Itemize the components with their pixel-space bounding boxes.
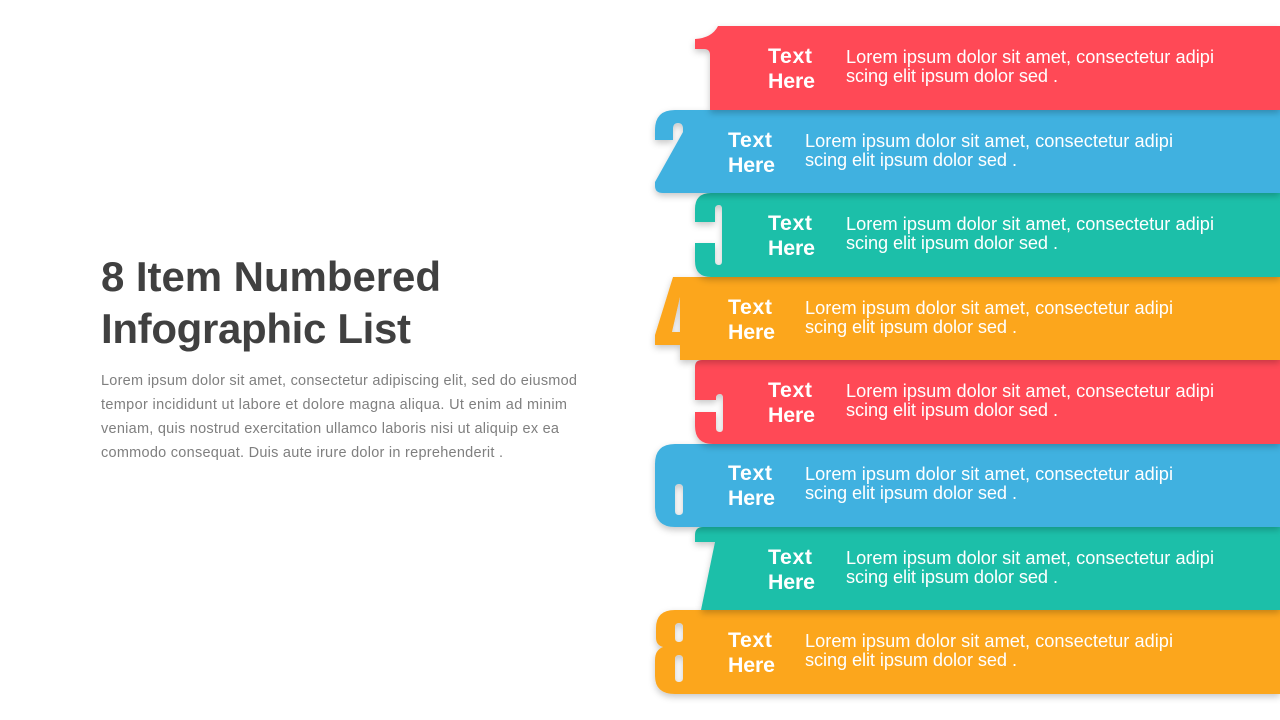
- item 4 heading: Text: [728, 295, 772, 319]
- item 6 heading: Here: [728, 486, 775, 510]
- item 7 heading: [768, 545, 815, 594]
- item 3 description: scing elit ipsum dolor sed .: [846, 233, 1058, 253]
- shape: blue banner with number 6: [655, 444, 1280, 527]
- item 5 description: [846, 381, 1214, 420]
- item 5 description: scing elit ipsum dolor sed .: [846, 400, 1058, 420]
- body text: Lorem ipsum dolor sit amet, consectetur adipiscing elit, sed do eiusmod: [101, 373, 577, 389]
- shape: red banner with number 5: [695, 360, 1280, 444]
- item 6 description: Lorem ipsum dolor sit amet, consectetur adipi: [805, 464, 1173, 484]
- item 1 heading: [768, 44, 815, 93]
- body text: [101, 373, 577, 461]
- panel: item 7: [695, 527, 1280, 610]
- item 3 heading: Text: [768, 211, 812, 235]
- item 3 description: [846, 214, 1214, 253]
- panel: item 5: [695, 360, 1280, 444]
- item 4 heading: Here: [728, 320, 775, 344]
- item 7 description: scing elit ipsum dolor sed .: [846, 567, 1058, 587]
- shape: teal banner with number 7: [695, 527, 1280, 610]
- item 1 description: Lorem ipsum dolor sit amet, consectetur adipi: [846, 47, 1214, 67]
- title: [101, 253, 441, 352]
- body text: commodo consequat. Duis aute irure dolor in reprehenderit .: [101, 445, 503, 461]
- item 4 description: Lorem ipsum dolor sit amet, consectetur adipi: [805, 298, 1173, 318]
- item 8 description: Lorem ipsum dolor sit amet, consectetur adipi: [805, 631, 1173, 651]
- item 2 description: scing elit ipsum dolor sed .: [805, 150, 1017, 170]
- item 3 heading: Here: [768, 236, 815, 260]
- item 8 description: scing elit ipsum dolor sed .: [805, 650, 1017, 670]
- shape: orange banner with number 4: [655, 277, 1280, 360]
- item 7 description: [846, 548, 1214, 587]
- item 8 heading: Text: [728, 628, 772, 652]
- item 6 description: [805, 464, 1173, 503]
- title: Infographic List: [101, 305, 411, 352]
- item 4 description: [805, 298, 1173, 337]
- panel: item 2: [655, 110, 1280, 193]
- item 1 description: scing elit ipsum dolor sed .: [846, 66, 1058, 86]
- item 5 heading: [768, 378, 815, 427]
- item 7 heading: Text: [768, 545, 812, 569]
- item 8 heading: [728, 628, 775, 677]
- item 2 heading: Here: [728, 153, 775, 177]
- body text: tempor incididunt ut labore et dolore magna aliqua. Ut enim ad minim: [101, 397, 567, 413]
- item 2 description: Lorem ipsum dolor sit amet, consectetur adipi: [805, 131, 1173, 151]
- item 5 heading: Text: [768, 378, 812, 402]
- item 2 heading: Text: [728, 128, 772, 152]
- item 5 description: Lorem ipsum dolor sit amet, consectetur adipi: [846, 381, 1214, 401]
- item 2 description: [805, 131, 1173, 170]
- item 4 heading: [728, 295, 775, 344]
- item 8 heading: Here: [728, 653, 775, 677]
- panel: item 1: [695, 26, 1280, 110]
- item 8 description: [805, 631, 1173, 670]
- item 1 heading: Text: [768, 44, 812, 68]
- shape: teal banner with number 3: [695, 193, 1280, 277]
- item 3 heading: [768, 211, 815, 260]
- shape: orange banner with number 8: [655, 610, 1280, 694]
- title: 8 Item Numbered: [101, 253, 441, 300]
- item 2 heading: [728, 128, 775, 177]
- item 3 description: Lorem ipsum dolor sit amet, consectetur adipi: [846, 214, 1214, 234]
- panel: item 8: [655, 610, 1280, 694]
- item 4 description: scing elit ipsum dolor sed .: [805, 317, 1017, 337]
- panel: item 4: [655, 277, 1280, 360]
- item 5 heading: Here: [768, 403, 815, 427]
- item 7 heading: Here: [768, 570, 815, 594]
- item 6 heading: [728, 461, 775, 510]
- shape: blue banner with number 2: [655, 110, 1280, 193]
- item 6 description: scing elit ipsum dolor sed .: [805, 483, 1017, 503]
- item 7 description: Lorem ipsum dolor sit amet, consectetur adipi: [846, 548, 1214, 568]
- shape: red banner with number 1: [695, 26, 1280, 110]
- item 1 description: [846, 47, 1214, 86]
- item 1 heading: Here: [768, 69, 815, 93]
- panel: item 6: [655, 444, 1280, 527]
- body text: veniam, quis nostrud exercitation ullamco laboris nisi ut aliquip ex ea: [101, 421, 560, 437]
- panel: item 3: [695, 193, 1280, 277]
- item 6 heading: Text: [728, 461, 772, 485]
